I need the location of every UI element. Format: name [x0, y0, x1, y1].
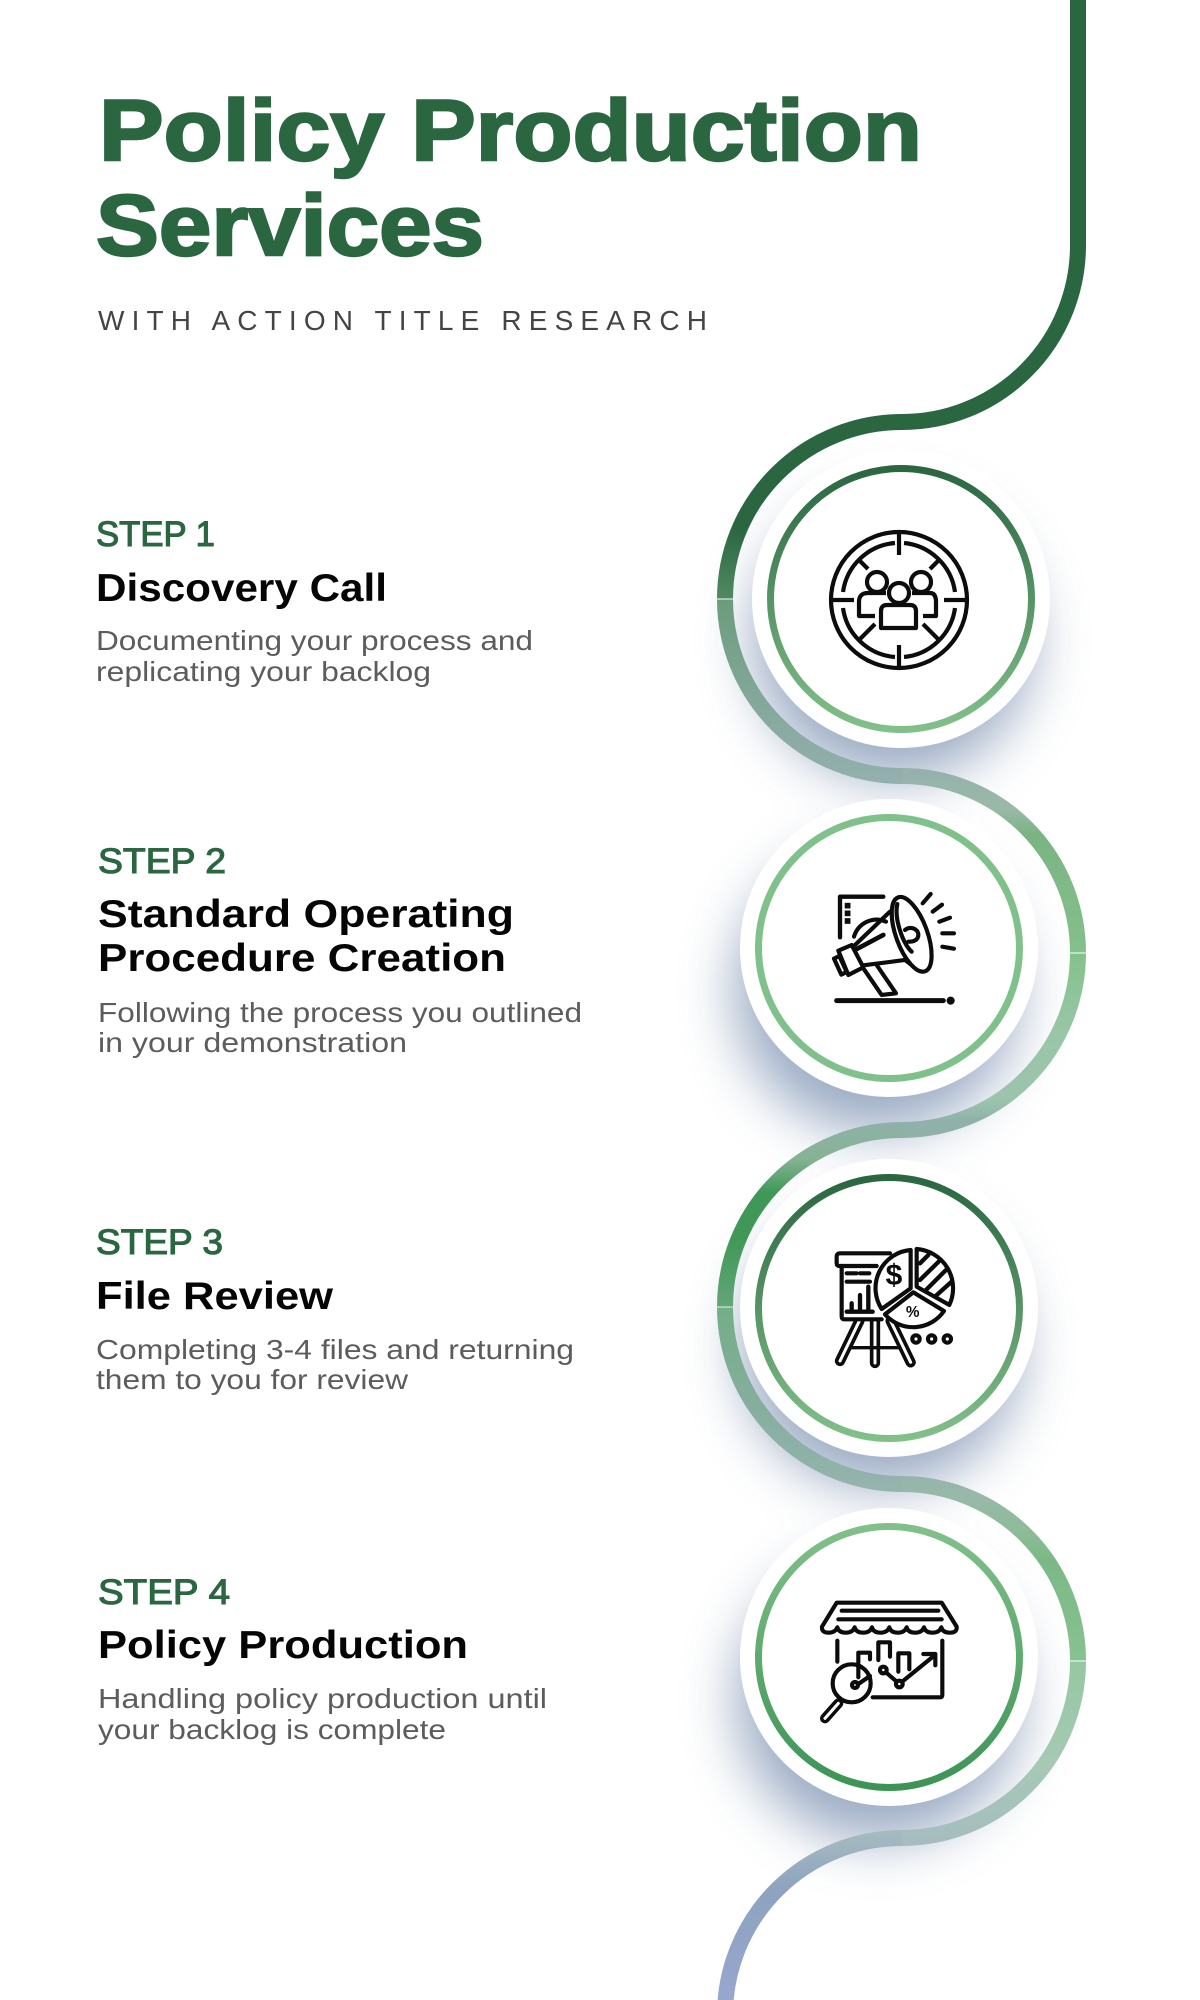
panel: step 4 circle [740, 1508, 1038, 1806]
step 1 description [96, 625, 533, 687]
step 1 label: STEP 1 [96, 515, 215, 554]
panel: step 1 circle [752, 450, 1050, 748]
step 3 description: Completing 3-4 files and returning [96, 1334, 574, 1365]
icon: megaphone [834, 892, 954, 1003]
step 3 heading: File Review [96, 1275, 334, 1318]
step 4 description: your backlog is complete [98, 1714, 446, 1745]
winding connector path [725, 0, 1078, 2000]
panel: step 2 circle [740, 799, 1038, 1097]
title: Services [96, 178, 484, 274]
step 2 heading: Standard Operating [98, 893, 514, 936]
icon: presentation board with pie chart: $ [886, 1259, 903, 1292]
icon: target with group of people [830, 531, 968, 669]
step 1 description: Documenting your process and [96, 625, 533, 656]
drop shadows under step circles [735, 499, 1033, 1841]
step 2 label: STEP 2 [98, 842, 226, 881]
step 1 description: replicating your backlog [96, 656, 431, 687]
step 4 description [98, 1683, 547, 1745]
panel: step 3 circle [740, 1159, 1038, 1457]
step 3 label: STEP 3 [96, 1223, 223, 1262]
icon: storefront with analytics [822, 1603, 957, 1718]
step 3 description: them to you for review [96, 1364, 409, 1395]
step 3 description [96, 1334, 574, 1395]
subtitle: WITH ACTION TITLE RESEARCH [98, 305, 707, 336]
step 2 description [98, 997, 582, 1058]
step 4 description: Handling policy production until [98, 1683, 547, 1714]
panel: step 3 text [96, 1223, 574, 1395]
step 2 description: Following the process you outlined [98, 997, 582, 1028]
step 2 heading: Procedure Creation [98, 937, 506, 980]
panel: step 1 text [96, 515, 533, 687]
step 1 heading: Discovery Call [96, 567, 387, 610]
step 4 heading: Policy Production [98, 1624, 468, 1667]
title: Policy Production [99, 83, 922, 179]
icon: presentation board with pie chart [837, 1249, 953, 1363]
panel: step 4 text [98, 1573, 547, 1745]
panel: step 2 text [98, 842, 582, 1058]
step 2 heading [98, 893, 514, 980]
step 4 label: STEP 4 [98, 1573, 230, 1612]
step 2 description: in your demonstration [98, 1027, 407, 1058]
icon: presentation board with pie chart: % [906, 1304, 920, 1321]
title [96, 83, 922, 274]
